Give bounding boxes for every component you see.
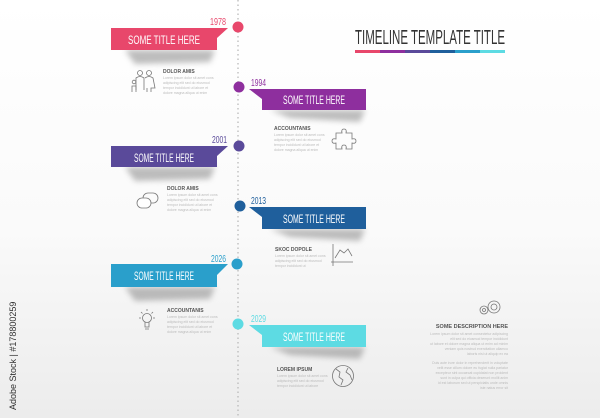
milestone 2013 [234, 196, 366, 241]
timeline axis [237, 0, 239, 418]
block: skoc dopole: tempor incididunt ut [275, 264, 306, 268]
description block: sunt in culpa qui officia deserunt mollit anim [440, 376, 508, 380]
block: dolor amis 2: adipiscing elit sed do eiusmod [167, 198, 214, 202]
block: lorem ipsum [277, 366, 354, 388]
milestone 1978: SOME TITLE HERE [128, 33, 200, 47]
block: accountanis 1: dolore magna aliqua ut enim [274, 148, 318, 152]
block: dolor amis 2: dolore magna aliqua ut enim [167, 208, 211, 212]
description block: SOME DESCRIPTION HERE [436, 324, 508, 330]
description block: laboris nisi ut aliquip ex ea [467, 352, 508, 356]
milestone 2026: SOME TITLE HERE [134, 269, 194, 283]
block: dolor amis 2: tempor incididunt ut labore et [167, 203, 212, 207]
block: accountanis 1: ACCOUNTANIS [274, 126, 311, 132]
milestone 1978: 1978 [210, 17, 226, 28]
block: dolor amis 2 [137, 186, 218, 212]
block: accountanis 2: Lorem ipsum dolor sit amet cons [167, 315, 218, 319]
block: dolor amis 1: tempor incididunt ut labore et [163, 86, 208, 90]
milestone 1994: SOME TITLE HERE [283, 93, 345, 107]
description block: ut labore et dolore magna aliqua ut enim ad minim [430, 342, 508, 346]
block: dolor amis 1: Lorem ipsum dolor sit amet cons [163, 76, 214, 80]
block: skoc dopole: SKOC DOPOLE [275, 247, 313, 253]
block: accountanis 1: adipiscing elit sed do eiusmod [274, 138, 321, 142]
milestone 2001: SOME TITLE HERE [134, 151, 194, 165]
milestone 2029: SOME TITLE HERE [283, 330, 345, 344]
block: skoc dopole: adipiscing elit sed do eiusmod [275, 259, 322, 263]
block: lorem ipsum: adipiscing elit sed do eiusmod [277, 379, 324, 383]
block: skoc dopole: Lorem ipsum dolor sit amet cons [275, 254, 326, 258]
description block: iste natus error sit [480, 386, 508, 390]
block: skoc dopole [275, 244, 353, 268]
block: accountanis 2: adipiscing elit sed do eiusmod [167, 320, 214, 324]
block: lorem ipsum: tempor incididunt ut labore [277, 384, 318, 388]
block: accountanis 2 [139, 308, 218, 334]
milestone 2001: 2001 [212, 135, 227, 146]
description block: veniam quis nostrud exercitation ullamco [445, 347, 508, 351]
milestone 2026: 2026 [211, 254, 226, 265]
block: dolor amis 1: dolore magna aliqua ut enim [163, 91, 207, 95]
block: accountanis 1: tempor incididunt ut labore et [274, 143, 319, 147]
milestone 2026 [111, 254, 242, 301]
block: accountanis 2: ACCOUNTANIS [167, 308, 204, 314]
milestone 2001 [111, 135, 244, 181]
milestone 2029 [232, 314, 366, 359]
description block: excepteur sint occaecat cupidatat non proident [436, 371, 508, 375]
block: lorem ipsum: Lorem ipsum dolor sit amet cons [277, 374, 328, 378]
description block: velit esse cillum dolore eu fugiat nulla pariatur [437, 366, 509, 370]
block: dolor amis 2: Lorem ipsum dolor sit amet cons [167, 193, 218, 197]
milestone 1978 [111, 17, 244, 64]
block: accountanis 1: Lorem ipsum dolor sit amet cons [274, 133, 325, 137]
description block: id est laborum sed ut perspiciatis unde omnis [438, 381, 508, 385]
description block: Lorem ipsum dolor sit amet consectetur adipiscing [430, 332, 508, 336]
block: accountanis 2: dolore magna aliqua ut enim [167, 330, 211, 334]
watermark side text: Adobe Stock | #178800259 [8, 302, 18, 410]
description block: Duis aute irure dolor in reprehenderit in voluptate [432, 361, 508, 365]
milestone 2013: SOME TITLE HERE [283, 212, 345, 226]
description block [430, 301, 509, 390]
block: dolor amis 1: DOLOR AMIS [163, 69, 195, 75]
block: accountanis 2: tempor incididunt ut labore et [167, 325, 212, 329]
block: accountanis 1 [274, 126, 356, 152]
description block: elit sed do eiusmod tempor incididunt [450, 337, 508, 341]
milestone 1994 [234, 78, 366, 122]
block: dolor amis 2: DOLOR AMIS [167, 186, 199, 192]
block: lorem ipsum: LOREM IPSUM [277, 367, 312, 373]
milestone 2013: 2013 [251, 196, 266, 207]
block: dolor amis 1: adipiscing elit sed do eiusmod [163, 81, 210, 85]
block: dolor amis 1 [132, 69, 214, 95]
milestone 2029: 2029 [251, 314, 266, 325]
title [355, 27, 505, 53]
milestone 1994: 1994 [251, 78, 266, 89]
